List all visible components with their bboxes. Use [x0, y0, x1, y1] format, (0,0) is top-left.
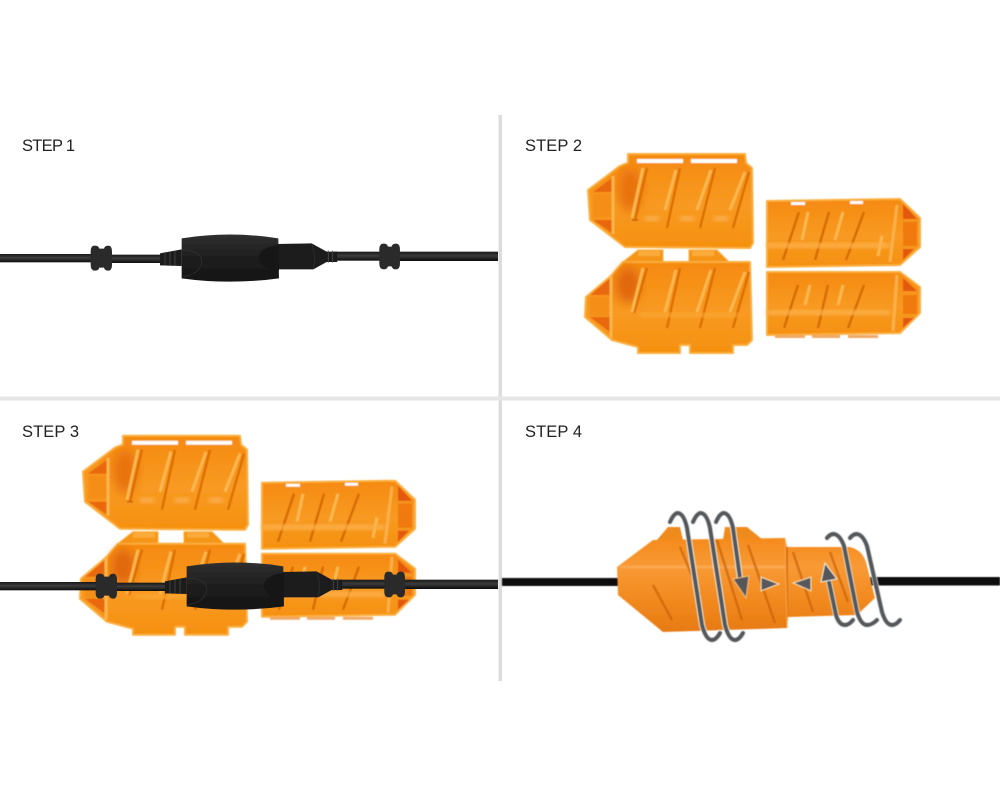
- icon: rotating arrows left: [670, 513, 749, 640]
- divider: horizontal: [0, 396, 1000, 400]
- illustration: orange casing halves: [80, 436, 415, 635]
- heading: step 3: STEP 3: [22, 423, 79, 441]
- panel: step 3: [0, 423, 515, 635]
- illustration: closed orange casing: [617, 527, 875, 632]
- panel: step 4: [502, 423, 1000, 640]
- heading: step 2: STEP 2: [525, 137, 582, 155]
- icon: inward triangles: [761, 577, 811, 591]
- panel: step 2: [525, 137, 920, 353]
- illustration: black cable with connector: [0, 234, 510, 282]
- illustration: cable laid into casing: [0, 562, 515, 610]
- icon: rotating arrows right: [821, 534, 900, 625]
- illustration: black cable through casing: [502, 577, 1000, 586]
- heading: step 4: STEP 4: [525, 423, 582, 441]
- illustration: open orange casing halves: [585, 154, 920, 353]
- divider: vertical: [498, 115, 502, 681]
- heading: step 1: STEP 1: [22, 137, 75, 155]
- panel: step 1: [0, 137, 510, 282]
